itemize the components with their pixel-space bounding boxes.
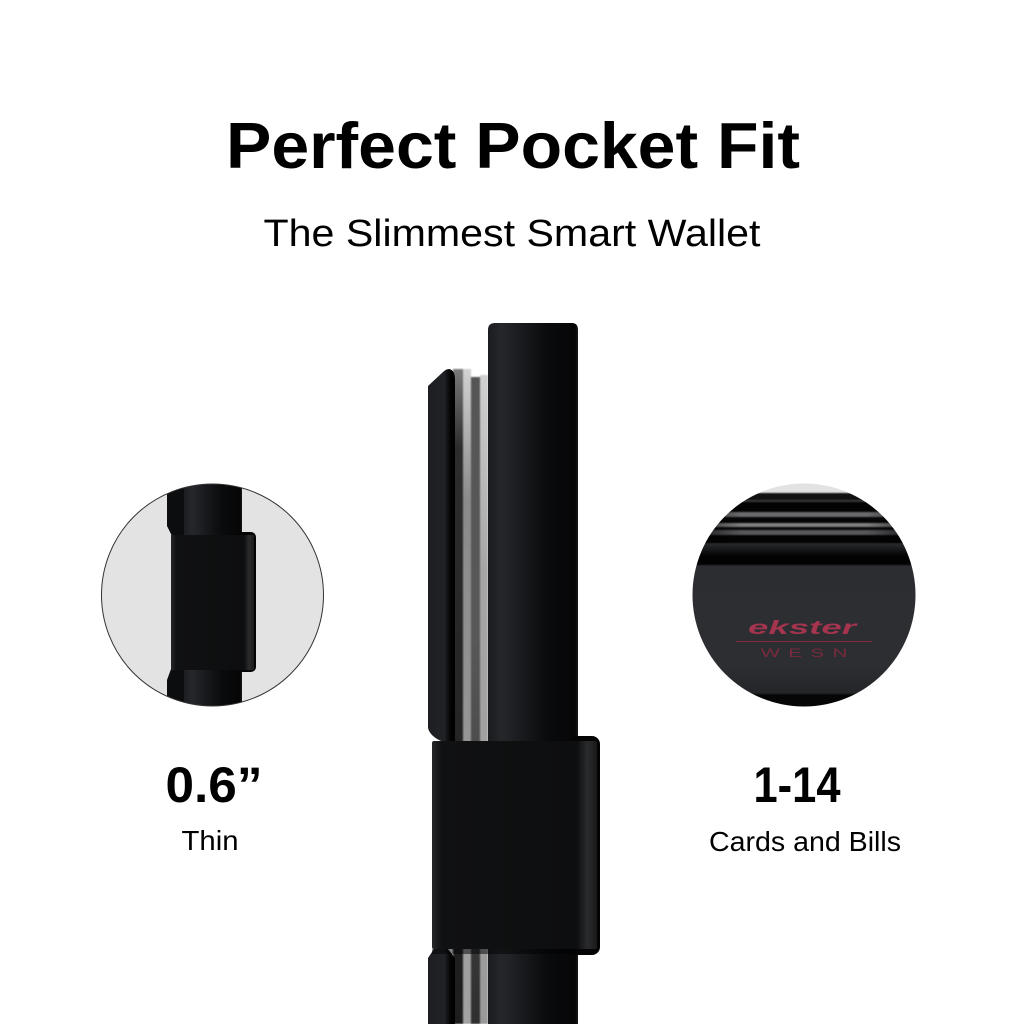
wallet main tube [488,323,578,1024]
ekster logo: ekster [748,618,859,639]
stat: thickness: 0.6” [166,757,262,813]
wallet side view [428,323,600,1024]
wallet front plate [428,369,455,741]
stat: capacity: Cards and Bills [709,826,901,857]
title: Perfect Pocket Fit [226,109,800,182]
stat: thickness: Thin [182,825,238,856]
wallet elastic band [432,741,597,949]
stat: capacity [709,757,901,857]
circle: capacity detail [690,480,920,710]
wallet band tab [570,736,600,955]
subtitle: The Slimmest Smart Wallet [264,213,761,255]
stat: thickness [166,757,262,856]
circle: thin detail [102,480,324,710]
detail side profile [167,480,256,710]
wesn label: WESN [761,646,847,660]
stat: capacity: 1-14 [754,757,841,813]
wallet cards stack [453,369,488,1024]
